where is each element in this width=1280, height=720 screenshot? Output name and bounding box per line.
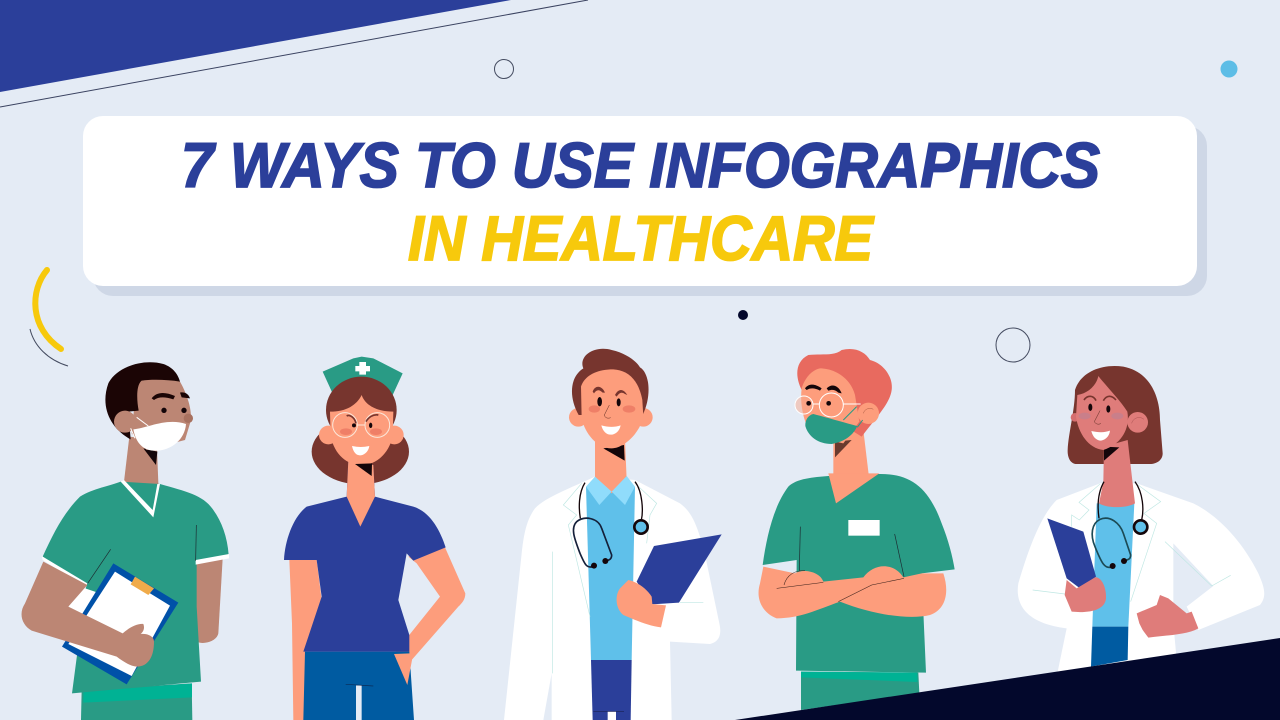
- top-left navy corner banner: [0, 0, 588, 107]
- decorative circles and arcs: [30, 60, 1238, 366]
- person 5: female doctor with clipboard: [1018, 366, 1264, 673]
- bottom-right dark banner: [735, 638, 1280, 720]
- person 3: doctor with stethoscope and blue clipboard: [504, 349, 722, 720]
- title card: [83, 116, 1207, 296]
- person 2: nurse with cap and glasses: [284, 357, 465, 720]
- title line 2: IN HEALTHCARE: [408, 204, 875, 274]
- person 4: surgeon with green mask and crossed arms: [759, 349, 955, 710]
- title line 1: 7 WAYS TO USE INFOGRAPHICS: [181, 131, 1100, 201]
- person 1: nurse with white mask and clipboard: [22, 362, 229, 720]
